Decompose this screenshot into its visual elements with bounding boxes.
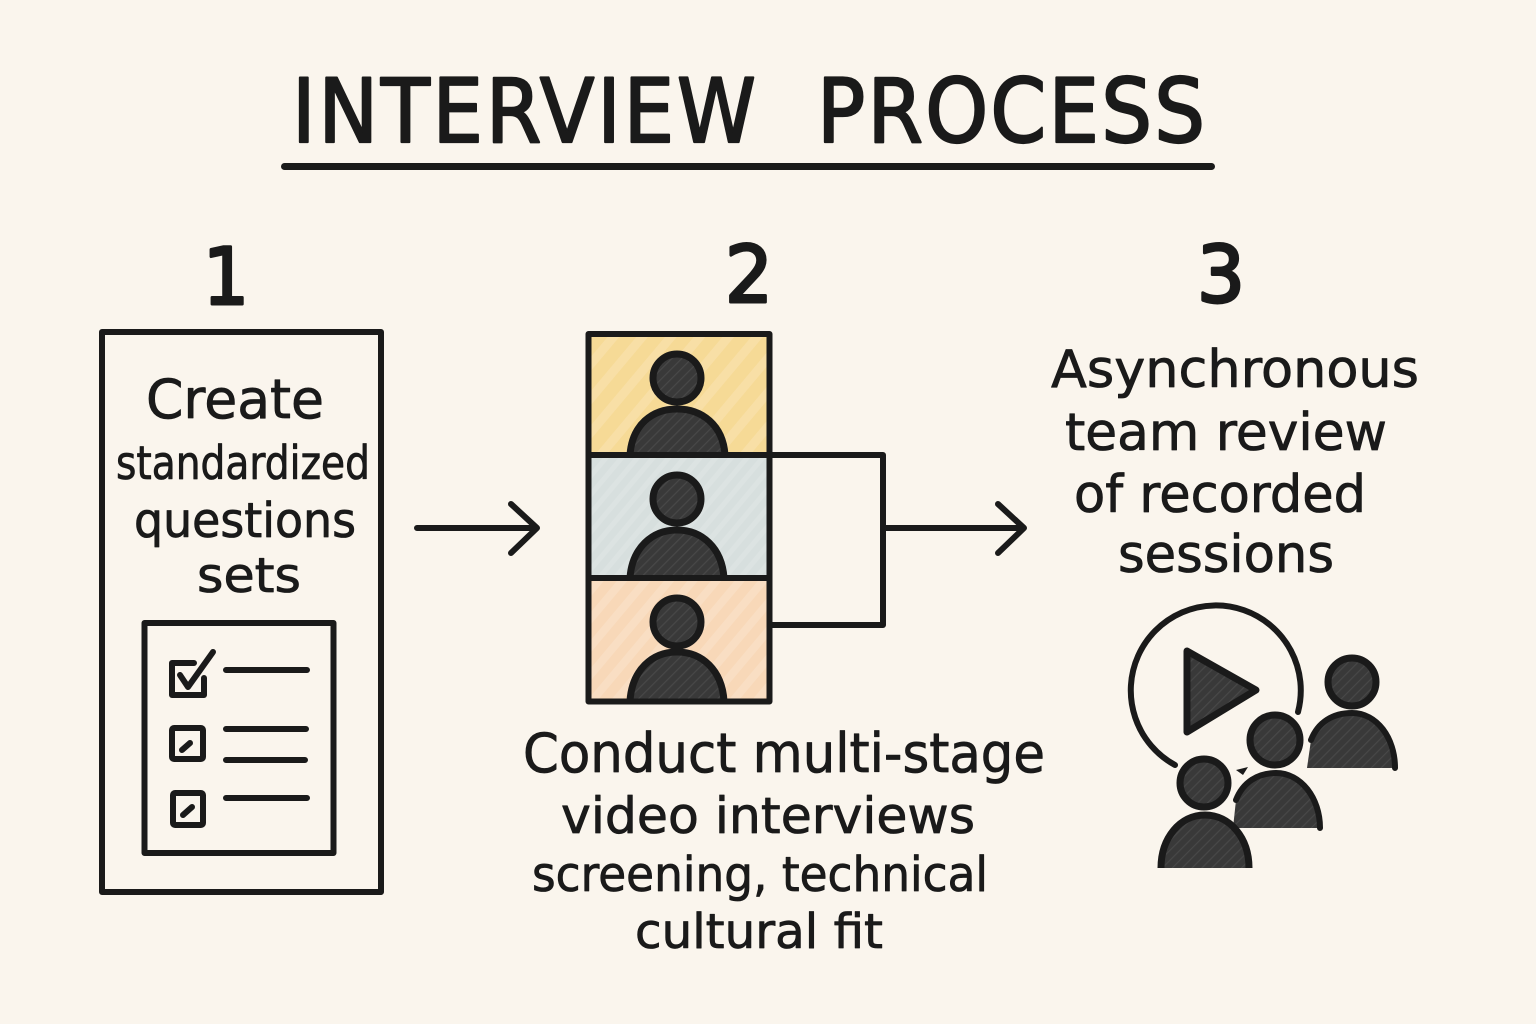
video tile: yellow bbox=[588, 334, 770, 455]
panel: video interview stack bbox=[588, 334, 770, 702]
step 2 text bbox=[523, 722, 1045, 960]
step number 3: 3 bbox=[1197, 231, 1245, 321]
step 1 text: standardized bbox=[116, 436, 370, 490]
step 1 text bbox=[116, 368, 370, 604]
step 3 text bbox=[1051, 340, 1419, 585]
arrow: step 1 to step 2 bbox=[417, 504, 537, 553]
title: INTERVIEW bbox=[292, 60, 756, 163]
play triangle bbox=[1187, 651, 1256, 732]
video tile: peach bbox=[588, 578, 770, 702]
step 3 text: of recorded bbox=[1074, 465, 1366, 525]
icon: checklist bbox=[144, 623, 334, 853]
icon: playback and team bbox=[1131, 605, 1395, 868]
panel: step 1 document bbox=[102, 332, 381, 892]
step 2 text: screening, technical bbox=[532, 847, 988, 903]
person left bbox=[1161, 759, 1249, 868]
play circle bbox=[1131, 605, 1301, 765]
title bbox=[281, 60, 1215, 170]
step 3 text: Asynchronous bbox=[1051, 340, 1419, 400]
video tile: blue-grey bbox=[588, 455, 770, 578]
step 1 text: sets bbox=[197, 548, 301, 604]
step 2 text: Conduct multi-stage bbox=[523, 722, 1045, 785]
step 1 text: questions bbox=[134, 493, 356, 549]
person middle bbox=[1233, 715, 1320, 828]
step number 1: 1 bbox=[203, 233, 249, 323]
step 2 text: video interviews bbox=[561, 787, 975, 845]
step number 2: 2 bbox=[725, 231, 773, 321]
title: PROCESS bbox=[817, 60, 1205, 163]
small ink mark bbox=[1236, 767, 1248, 775]
step 1 text: Create bbox=[146, 368, 324, 431]
step 3 text: team review bbox=[1065, 403, 1387, 463]
bracket and arrow: step 2 to step 3 bbox=[771, 455, 1024, 625]
person right bbox=[1307, 658, 1395, 768]
step 2 text: cultural fit bbox=[635, 904, 883, 960]
step 3 text: sessions bbox=[1118, 525, 1334, 585]
